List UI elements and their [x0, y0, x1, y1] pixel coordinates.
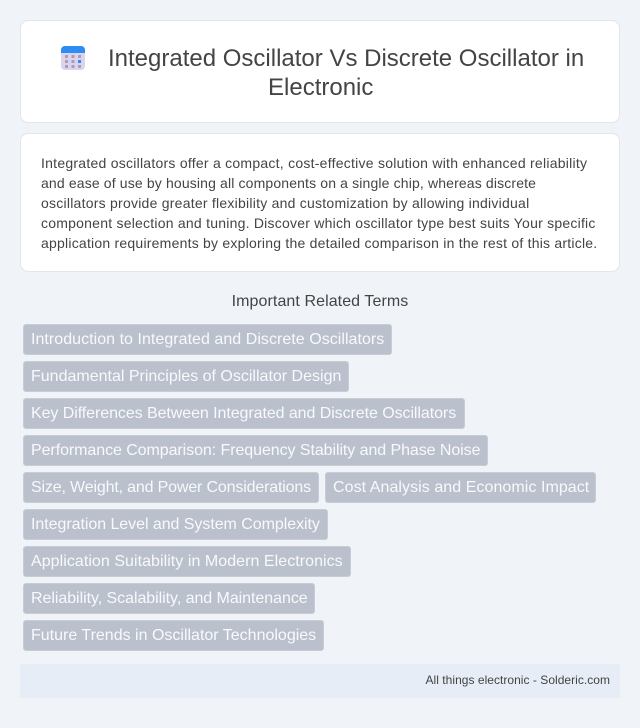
intro paragraph — [41, 155, 597, 251]
tag: Reliability, Scalability, and Maintenance — [31, 590, 308, 607]
header card — [20, 20, 620, 123]
tag — [23, 435, 488, 466]
tag: Integration Level and System Complexity — [31, 516, 320, 533]
intro text panel — [20, 133, 620, 272]
tag — [23, 398, 465, 429]
icon: calendar — [61, 46, 85, 70]
intro paragraph: component selection and tuning. Discover which oscillator type best suits Your specific — [41, 215, 596, 231]
title — [108, 45, 584, 101]
tag: Performance Comparison: Frequency Stability and Phase Noise — [31, 442, 480, 459]
title: Electronic — [268, 74, 373, 101]
tag: Key Differences Between Integrated and Discrete Oscillators — [31, 405, 456, 422]
title: Integrated Oscillator Vs Discrete Oscillator in — [108, 45, 584, 72]
tag: Application Suitability in Modern Electronics — [31, 553, 343, 570]
intro paragraph: and ease of use by housing all components on a single chip, whereas discrete — [41, 175, 536, 191]
tag — [23, 509, 328, 540]
tag: Size, Weight, and Power Considerations — [31, 479, 311, 496]
tag — [23, 324, 392, 355]
tag: Introduction to Integrated and Discrete Oscillators — [31, 331, 384, 348]
tag — [23, 361, 349, 392]
section heading: Important Related Terms — [232, 293, 408, 310]
intro paragraph: Integrated oscillators offer a compact, cost-effective solution with enhanced reliability — [41, 155, 587, 171]
intro paragraph: application requirements by exploring the detailed comparison in the rest of this article. — [41, 235, 597, 251]
tag — [23, 546, 351, 577]
tag — [23, 583, 315, 614]
tag — [325, 472, 596, 503]
related terms tags — [23, 324, 596, 651]
footer text: All things electronic - Solderic.com — [426, 673, 610, 687]
tag: Future Trends in Oscillator Technologies — [31, 627, 316, 644]
tag — [23, 620, 324, 651]
footer bar — [20, 664, 620, 698]
tag — [23, 472, 319, 503]
tag: Fundamental Principles of Oscillator Design — [31, 368, 341, 385]
tag: Cost Analysis and Economic Impact — [333, 479, 589, 496]
intro paragraph: oscillators provide greater flexibility and customization by allowing individual — [41, 195, 529, 211]
